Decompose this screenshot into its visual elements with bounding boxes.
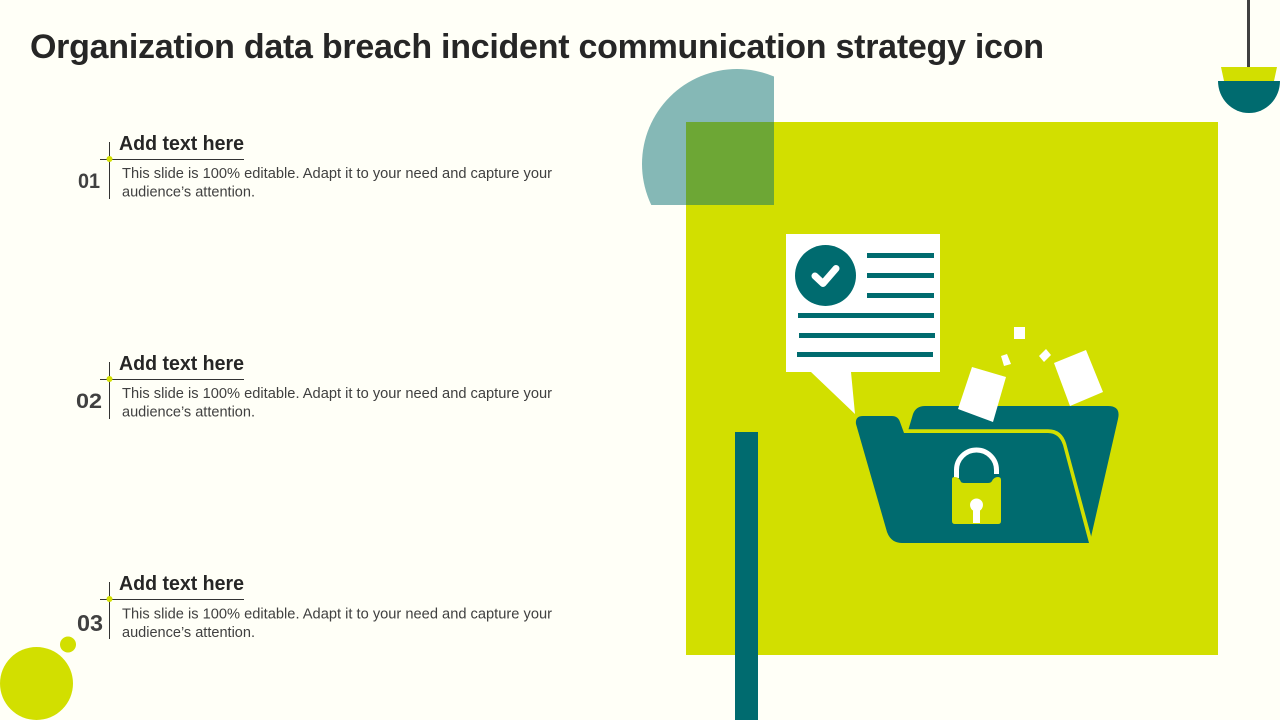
title: Organization data breach incident communication strategy icon xyxy=(30,28,1044,66)
item 01 xyxy=(78,133,552,200)
icon: locked folder xyxy=(856,327,1119,543)
teal vertical bar xyxy=(735,432,758,720)
item 02 heading: Add text here xyxy=(119,353,244,375)
item 01 heading: Add text here xyxy=(119,133,244,155)
folder edge highlight xyxy=(907,430,1090,537)
item 02 body: This slide is 100% editable. Adapt it to your need and capture your xyxy=(122,386,552,402)
item 03 number: 03 xyxy=(77,610,103,636)
document text lines xyxy=(797,253,935,357)
icon: padlock xyxy=(952,450,1001,524)
panel: lime background square xyxy=(686,122,1218,655)
item 03 heading: Add text here xyxy=(119,573,244,595)
corner circles decoration xyxy=(0,636,76,720)
item 01 body: audience’s attention. xyxy=(122,184,255,200)
item 02 body: audience’s attention. xyxy=(122,404,255,420)
item 02 xyxy=(76,353,552,420)
item 03 marker xyxy=(100,582,244,639)
hanging lamp decoration xyxy=(1218,0,1280,113)
item 03 xyxy=(77,573,552,641)
flying papers xyxy=(958,327,1103,422)
item 02 number: 02 xyxy=(76,390,102,413)
decorative translucent teal circle xyxy=(642,69,774,205)
folder front xyxy=(856,416,1089,543)
icon: check badge xyxy=(795,245,856,306)
item 02 marker xyxy=(100,362,244,419)
folder back xyxy=(908,406,1119,537)
item 01 body: This slide is 100% editable. Adapt it to your need and capture your xyxy=(122,166,552,182)
icon: speech bubble document xyxy=(786,234,940,414)
item 03 body: This slide is 100% editable. Adapt it to your need and capture your xyxy=(122,606,552,622)
item 01 marker xyxy=(100,142,244,199)
item 03 body: audience’s attention. xyxy=(122,625,255,641)
item 01 number: 01 xyxy=(78,170,100,193)
